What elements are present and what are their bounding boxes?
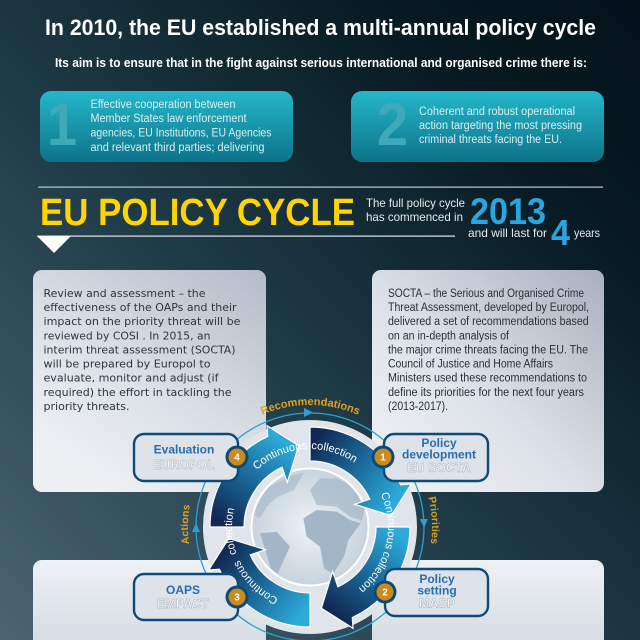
stage 4: evaluation: EUROPOL [153,458,215,472]
panel: SOCTA: (2013-2017). [388,401,448,413]
panel: SOCTA: Council of Justice and Home Affairs [388,359,553,371]
aim 1 text: Member States law enforcement [90,113,247,125]
panel: aim 1 [40,91,293,162]
panel: SOCTA [372,270,604,492]
stage 1: policy development: 1 [380,452,386,464]
aim 1 text: and relevant third parties; delivering [90,142,264,154]
stage 2: policy setting: 2 [382,588,388,598]
timeline note: years [574,226,600,240]
arrow captions: continuous collection: Continuous [254,443,307,468]
ring labels: Actions [180,504,190,544]
grey disc [203,420,417,634]
icon: pointer triangle [37,236,71,253]
timeline note [366,191,600,253]
panel: review and assessment: will be prepared by Europol to [44,358,211,371]
aim 1 text: Effective cooperation between [90,99,236,111]
panel: lower right [372,560,604,640]
panel: SOCTA: define its priorities for the next four years [388,387,584,399]
stage 4: evaluation: 4 [234,452,240,464]
aim 2 text [419,106,582,146]
subtitle: Its aim is to ensure that in the fight against serious international and organised crime there is: [55,55,587,70]
numeral 1: 1 [47,91,77,158]
ring labels: Recommendations [260,398,360,414]
title: In 2010, the EU established a multi-annual policy cycle [45,15,596,40]
heading: EU policy cycle: EU POLICY CYCLE [40,192,355,234]
arrow captions: continuous collection: collection [312,442,356,462]
aim 1 text [90,99,272,154]
aim 2 text: Coherent and robust operational [419,106,575,118]
timeline note: The full policy cycle [366,196,465,210]
timeline note: 4 [551,212,570,253]
stage 2: policy setting: Policy [419,572,455,586]
panel: SOCTA: on an in-depth analysis of [388,330,510,342]
arrow 4 [210,426,299,527]
stage 3: OAPS: 3 [234,592,240,604]
stage 3: OAPS: EMPACT [157,597,209,611]
stage 4: evaluation [134,434,248,481]
arrow captions: continuous collection: collection [224,508,236,554]
aim 1 text: agencies, EU Institutions, EU Agencies [90,128,272,140]
stage 1: policy development: development [402,448,476,462]
panel: SOCTA: SOCTA – the Serious and Organised Crime [388,288,584,300]
arrow 3 [209,538,310,627]
timeline note: and will last for [468,226,547,240]
stage 2: policy setting [374,569,488,616]
aim 2 text: action targeting the most pressing [419,120,582,132]
panel: SOCTA: delivered a set of recommendations based [388,316,589,328]
panel: aim 2 [351,91,604,162]
panel: review and assessment [33,270,266,492]
arrow 1 [310,427,411,516]
arrow 2 [321,527,410,628]
timeline note: 2013 [470,191,546,232]
panel: review and assessment: effectiveness of the OAPs and their [44,301,237,314]
stage 2: policy setting: setting [417,584,457,598]
ring labels: Priorities [428,496,440,544]
panel: review and assessment: required) the effort in tackling the [44,386,232,399]
ring labels [180,398,440,544]
numeral 2: 2 [377,91,408,158]
panel: review and assessment: Review and assessment – the [44,287,206,300]
stage 1: policy development: EU SOCTA [407,461,471,475]
panel: review and assessment: priority threats. [44,400,130,413]
panel: SOCTA: the major crime threats facing the EU. The [388,344,588,356]
panel: lower left [33,560,266,640]
stage 3: OAPS [134,574,248,620]
stage 4: evaluation: Evaluation [154,442,214,456]
panel: review and assessment: impact on the priority threat will be [44,315,241,328]
panel: SOCTA: Ministers used these recommendations to [388,373,587,385]
panel: review and assessment: evaluate, monitor and adjust (if [44,372,220,385]
panel: SOCTA: Threat Assessment, developed by Europol, [388,302,589,314]
aim 2 text: criminal threats facing the EU. [419,134,562,146]
arrow captions: continuous collection: Continuous [382,492,396,549]
stage 1: policy development [372,434,488,481]
cycle diagram [132,398,490,640]
timeline note: has commenced in [366,210,463,224]
arrow captions: continuous collection [224,442,396,604]
arrow captions: continuous collection: Continuous [234,560,277,604]
outer ring with arrows [192,408,428,640]
arrow captions: continuous collection: collection [358,552,389,592]
globe [252,468,368,586]
panel: review and assessment: reviewed by COSI . In 2015, an [44,330,211,342]
stage 2: policy setting: MASP [419,596,455,610]
panel: review and assessment: interim threat assessment (SOCTA) [44,344,236,356]
stage 3: OAPS: OAPS [166,583,200,597]
stage 1: policy development: Policy [421,436,457,450]
